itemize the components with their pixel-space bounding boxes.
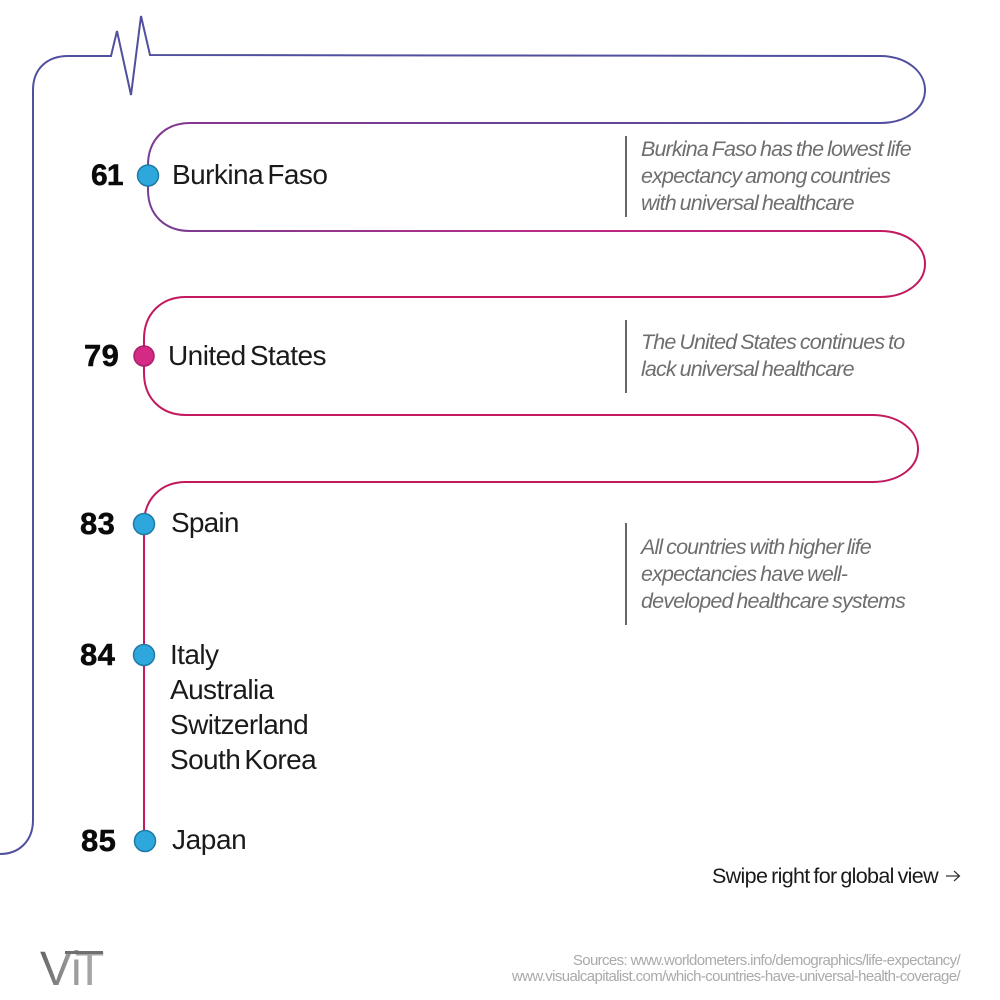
call to action: swipe right: Swipe right for global view xyxy=(712,864,938,888)
country: United States: United States xyxy=(168,340,326,371)
countries: Italy, Australia, Switzerland, South Korea: Switzerland xyxy=(170,709,308,740)
countries: Italy, Australia, Switzerland, South Korea: Italy xyxy=(170,639,218,670)
countries: Italy, Australia, Switzerland, South Korea xyxy=(170,639,317,775)
annotation: higher life expectancies: developed healthcare systems xyxy=(641,589,905,613)
winding timeline path: first row xyxy=(148,123,880,231)
sources: Sources: www.worldometers.info/demographics/life-expectancy/ xyxy=(573,952,960,968)
annotation: United States: The United States continues to xyxy=(641,330,904,354)
annotation: Burkina Faso: Burkina Faso has the lowest life xyxy=(641,137,911,161)
value: 83: 83 xyxy=(80,506,115,541)
annotation: Burkina Faso: with universal healthcare xyxy=(641,191,854,215)
heartbeat line xyxy=(0,16,925,854)
annotation: Burkina Faso: expectancy among countries xyxy=(641,164,890,188)
value: 61: 61 xyxy=(91,159,123,192)
annotation: United States: lack universal healthcare xyxy=(641,357,854,381)
marker: Japan xyxy=(134,830,156,852)
country: Burkina Faso: Burkina Faso xyxy=(172,159,327,190)
winding timeline path: lower rows xyxy=(144,231,925,840)
annotation: higher life expectancies: expectancies have well- xyxy=(641,562,847,586)
marker: Italy group xyxy=(134,644,154,666)
annotation: United States xyxy=(625,320,904,393)
marker: Spain xyxy=(134,514,154,534)
countries: Italy, Australia, Switzerland, South Korea: Australia xyxy=(170,674,274,705)
marker: United States xyxy=(134,346,154,366)
sources xyxy=(512,952,961,984)
annotation: Burkina Faso xyxy=(625,136,911,217)
country: Spain: Spain xyxy=(171,507,239,538)
value: 79: 79 xyxy=(84,338,119,373)
annotation: higher life expectancies xyxy=(625,523,905,625)
country: Japan: Japan xyxy=(172,824,246,855)
logo: ViT xyxy=(40,945,104,990)
sources: www.visualcapitalist.com/which-countries-have-universal-health-coverage/ xyxy=(512,968,960,984)
value: 85: 85 xyxy=(81,823,116,858)
annotation: higher life expectancies: All countries with higher life xyxy=(641,535,871,559)
marker: Burkina Faso xyxy=(138,165,158,186)
icon: arrow xyxy=(946,870,960,882)
value: 84: 84 xyxy=(80,637,115,672)
countries: Italy, Australia, Switzerland, South Korea: South Korea xyxy=(170,744,316,775)
